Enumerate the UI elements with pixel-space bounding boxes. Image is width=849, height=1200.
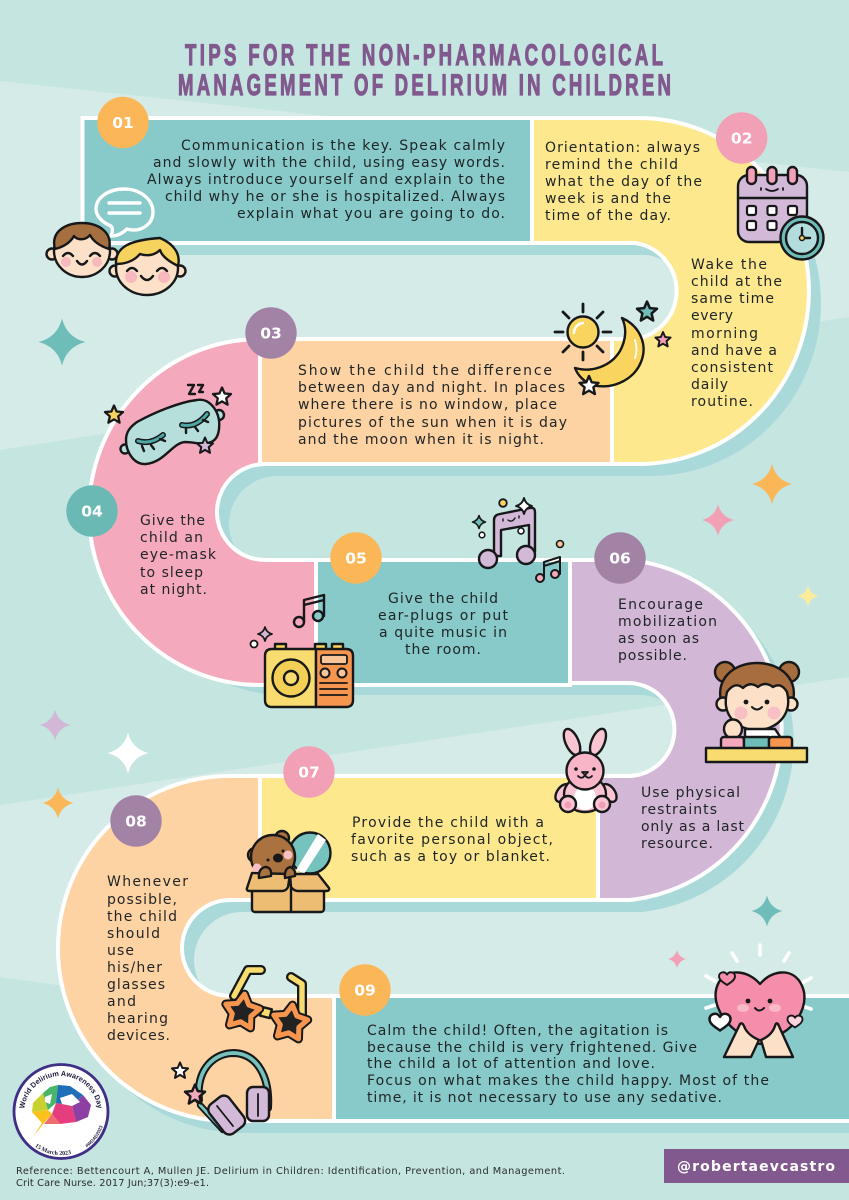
text: tip 07: favorite personal object, bbox=[351, 832, 553, 848]
icon: music notes bbox=[472, 498, 564, 582]
text: tip 01: child why he or she is hospitalized. Always bbox=[165, 189, 505, 205]
panel: tip 08 ribbon bbox=[58, 776, 334, 1121]
text: tip 09: the child a lot of attention and love. bbox=[367, 1056, 655, 1072]
ribbon shadow bbox=[69, 130, 849, 1133]
text: tip 08: the child bbox=[107, 909, 177, 925]
panel: tip 06 ribbon bbox=[570, 560, 782, 900]
text: tip 06 restraints: resource. bbox=[641, 836, 713, 852]
text: tip 08: hearing bbox=[107, 1011, 168, 1027]
text: tip 08: devices. bbox=[107, 1028, 170, 1044]
text: tip 08: his/her bbox=[107, 960, 162, 976]
panel: tip 03 ribbon bbox=[260, 339, 612, 464]
badge 01: 01 bbox=[112, 114, 134, 132]
text: tip 07: such as a toy or blanket. bbox=[351, 849, 550, 865]
badge 05: 05 bbox=[345, 550, 367, 568]
text: tip 06 encourage: Encourage bbox=[618, 597, 703, 613]
icon: headphones with stars bbox=[172, 1053, 269, 1137]
text: tip 03: where there is no window, place bbox=[298, 397, 557, 413]
text: tip 09: Calm the child! Often, the agitation is bbox=[367, 1023, 668, 1039]
icon: sun bbox=[555, 304, 611, 360]
logo: World Delirium Awareness Day: World Delirium Awareness Day bbox=[19, 1071, 102, 1108]
badge 08: 08 bbox=[125, 812, 147, 830]
text: tip 09: because the child is very frightened. Give bbox=[367, 1040, 697, 1056]
text: tip 01: Communication is the key. Speak calmly bbox=[181, 138, 505, 154]
icon: star sunglasses bbox=[223, 970, 309, 1040]
panel: tip 04 ribbon bbox=[89, 339, 316, 685]
text: tip 09: time, it is not necessary to use any sedative. bbox=[367, 1090, 722, 1106]
text: tip 04: to sleep bbox=[140, 565, 203, 581]
text: tip 02 orientation: time of the day. bbox=[545, 208, 671, 224]
panel: tip 09 ribbon bbox=[334, 996, 849, 1121]
badge 02 bbox=[716, 112, 767, 164]
panel: tip 02 ribbon bbox=[532, 118, 809, 464]
badge 02: 02 bbox=[731, 130, 752, 148]
text: tip 01: explain what you are going to do. bbox=[237, 206, 505, 222]
text: tip 06 restraints: only as a last bbox=[641, 819, 744, 835]
text: tip 08 bbox=[107, 874, 188, 1044]
text: tip 05: a quite music in bbox=[379, 625, 507, 641]
icon: heart held in hands bbox=[706, 945, 811, 1057]
icon: pink rabbit bbox=[552, 727, 620, 812]
text: tip 02 wake: routine. bbox=[691, 394, 753, 410]
text: tip 08: and bbox=[107, 994, 136, 1010]
icon: boy with blond hair bbox=[110, 238, 186, 295]
logo: World Delirium Awareness Day: 15 March 2023 bbox=[35, 1144, 71, 1156]
text: tip 02 orientation bbox=[545, 140, 702, 224]
icon: radio bbox=[265, 644, 353, 707]
text: tip 02 wake: Wake the bbox=[691, 257, 767, 273]
badge 03 bbox=[245, 307, 297, 359]
text: tip 06 restraints: Use physical bbox=[641, 785, 740, 801]
text: tip 08: Whenever bbox=[107, 874, 188, 890]
badge 04: 04 bbox=[81, 502, 103, 520]
text: tip 02 orientation: week is and the bbox=[545, 191, 671, 207]
text: tip 02 wake: daily bbox=[691, 377, 728, 393]
text: tip 02 orientation: Orientation: always bbox=[545, 140, 700, 156]
text: tip 08: possible, bbox=[107, 892, 177, 908]
text: tip 02 wake: every bbox=[691, 308, 733, 324]
text: tip 08: glasses bbox=[107, 977, 165, 993]
badge 05 bbox=[330, 532, 382, 584]
text: tip 01 bbox=[147, 138, 505, 222]
text: tip 07: Provide the child with a bbox=[352, 815, 544, 831]
handle badge bbox=[664, 1149, 849, 1183]
text: tip 04: eye-mask bbox=[140, 547, 217, 563]
text: tip 06 encourage: mobilization bbox=[618, 614, 717, 630]
text: tip 02 wake bbox=[691, 257, 782, 410]
badge 01 bbox=[97, 97, 149, 148]
handle badge: @robertaevcastro bbox=[677, 1159, 835, 1175]
badge 07: 07 bbox=[298, 764, 320, 782]
badge 07 bbox=[283, 746, 335, 798]
icon: calendar with clock bbox=[738, 167, 824, 260]
text: tip 05: Give the child bbox=[388, 591, 498, 607]
reference text bbox=[16, 1166, 565, 1189]
text: tip 08: should bbox=[107, 926, 160, 942]
text: tip 02 wake: consistent bbox=[691, 360, 774, 376]
panel: tip 07 ribbon bbox=[260, 776, 598, 900]
reference text: Crit Care Nurse. 2017 Jun;37(3):e9-e1. bbox=[16, 1178, 209, 1189]
text: tip 05: the room. bbox=[405, 642, 481, 658]
text: tip 04: child an bbox=[140, 530, 203, 546]
text: tip 04 bbox=[140, 513, 217, 598]
panel: tip 01 ribbon bbox=[82, 118, 532, 243]
icon: moon with stars bbox=[575, 302, 671, 394]
badge 09 bbox=[339, 964, 391, 1016]
reference text: Reference: Bettencourt A, Mullen JE. Delirium in Children: Identification, Prevention, and Management. bbox=[16, 1166, 565, 1177]
text: tip 09: Focus on what makes the child happy. Most of the bbox=[367, 1073, 769, 1089]
text: tip 02 wake: and have a bbox=[691, 343, 777, 359]
text: tip 03: Show the child the difference bbox=[298, 363, 552, 379]
text: tip 04: Give the bbox=[140, 513, 205, 529]
text: tip 06 encourage bbox=[618, 597, 717, 664]
text: tip 03: between day and night. In places bbox=[298, 380, 565, 396]
decorative sparkles bbox=[38, 318, 818, 968]
text: tip 05 bbox=[378, 591, 508, 658]
title: MANAGEMENT OF DELIRIUM IN CHILDREN bbox=[178, 70, 671, 102]
text: tip 06 encourage: possible. bbox=[618, 648, 687, 664]
text: tip 01: Always introduce yourself and explain to the bbox=[147, 172, 505, 188]
badge 06: 06 bbox=[609, 550, 631, 568]
badge 09: 09 bbox=[354, 982, 376, 1000]
text: tip 04: at night. bbox=[140, 582, 207, 598]
icon: teddy bear and ball in box bbox=[247, 831, 330, 912]
icon: small note near radio bbox=[250, 595, 324, 648]
badge 03: 03 bbox=[260, 324, 282, 342]
text: tip 06 restraints: restraints bbox=[641, 802, 717, 818]
text: tip 06 encourage: as soon as bbox=[618, 631, 699, 647]
text: tip 05: ear-plugs or put bbox=[378, 608, 508, 624]
icon: sleep mask bbox=[105, 385, 231, 464]
text: tip 07 bbox=[351, 815, 553, 865]
text: tip 03: and the moon when it is night. bbox=[298, 432, 544, 448]
badge 04 bbox=[66, 485, 118, 537]
icon: girl with toy blocks bbox=[706, 662, 807, 762]
icon: boy with brown hair bbox=[46, 223, 118, 277]
text: tip 02 wake: child at the bbox=[691, 274, 782, 290]
badge 06 bbox=[594, 532, 646, 584]
text: tip 09 bbox=[367, 1023, 769, 1106]
text: tip 01: and slowly with the child, using easy words. bbox=[153, 155, 505, 171]
icon: speech bubble bbox=[96, 189, 153, 236]
title bbox=[178, 40, 671, 102]
text: tip 02 orientation: what the day of the bbox=[545, 174, 702, 190]
logo: World Delirium Awareness Day bbox=[12, 1063, 110, 1160]
text: tip 02 wake: morning bbox=[691, 326, 758, 342]
number badges bbox=[66, 97, 767, 1016]
title: TIPS FOR THE NON-PHARMACOLOGICAL bbox=[185, 40, 663, 72]
text: tip 02 wake: same time bbox=[691, 291, 774, 307]
panel: tip 05 ribbon bbox=[316, 560, 570, 685]
text: tip 03: pictures of the sun when it is day bbox=[298, 415, 567, 431]
text: tip 06 restraints bbox=[641, 785, 744, 852]
text: tip 08: use bbox=[107, 943, 134, 959]
text: tip 02 orientation: remind the child bbox=[545, 157, 678, 173]
text: tip 03 bbox=[298, 363, 567, 448]
logo: World Delirium Awareness Day: #WDAD2023 bbox=[86, 1126, 102, 1148]
badge 08 bbox=[110, 795, 162, 847]
